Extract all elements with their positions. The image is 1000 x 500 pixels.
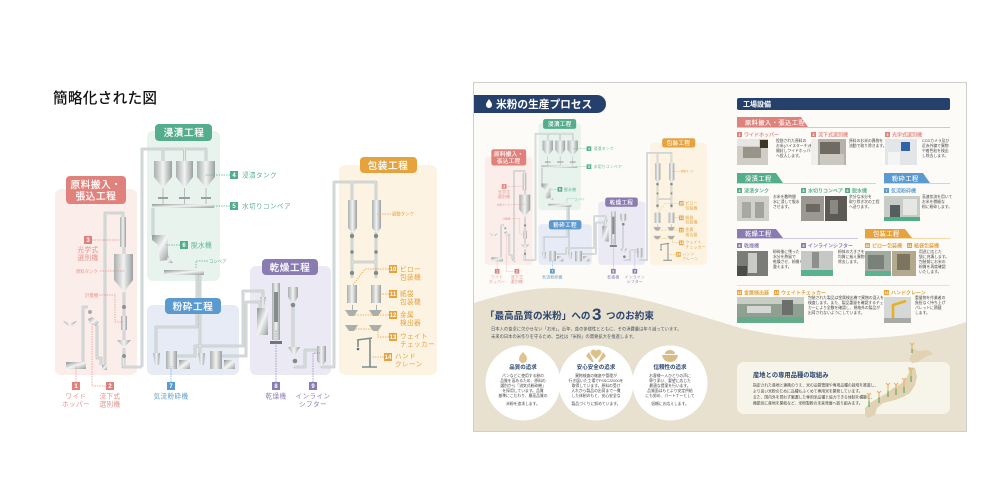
- labels: packaging: 11: [390, 292, 397, 298]
- mini process diagram: 選別機: [511, 279, 523, 284]
- section: drying equipment: 除去します。: [838, 259, 860, 264]
- section: milling equipment: 粉に粉砕します。: [922, 204, 952, 209]
- title: 簡略化された図: [53, 89, 157, 107]
- section: drying equipment: 粉体の大きさを: [838, 249, 865, 254]
- mini process diagram: 包装機: [685, 205, 698, 210]
- section: raw material equipment: 2: [812, 133, 814, 137]
- labels: milling: 7: [169, 384, 173, 390]
- banner: rice flour production process: [474, 95, 606, 113]
- labels: soaking: 浸漬タンク: [242, 170, 277, 180]
- mini process diagram: 12: [679, 228, 683, 232]
- circle: pursuit of safety: 製品づくりに努めています。: [572, 401, 620, 406]
- circle: pursuit of quality: パンなどに使用する粉の: [502, 373, 544, 378]
- section: packaging equipment: [865, 229, 950, 276]
- mini process diagram: 乾燥機: [607, 275, 619, 280]
- section: raw material equipment: お米(ハイスターチ)を: [776, 143, 813, 148]
- circle: pursuit of quality: を採用しています。品質: [502, 388, 544, 393]
- circle: pursuit of reliability: 品質面はもとより安定供給: [647, 388, 693, 393]
- heading: milling: 粉砕工程: [173, 301, 213, 313]
- intro text: 未来の日本の米作りを守るため、当社は「米粉」の需要拡大を推進します。: [491, 333, 637, 340]
- section: drying equipment: 9: [802, 244, 804, 248]
- mini process diagram: 粉砕工程: [553, 221, 577, 229]
- section: raw material equipment: 原料のお米の異物を: [849, 138, 883, 143]
- process diagram: [55, 124, 437, 408]
- mini process diagram: 光学式: [498, 189, 510, 194]
- circle: pursuit of reliability: 信頼にお応えします。: [651, 401, 689, 406]
- labels: packaging: 紙袋: [400, 289, 414, 298]
- section: inspection equipment: パレットに積載: [915, 305, 942, 310]
- mini process diagram: 流下式: [511, 275, 523, 280]
- circle: pursuit of quality: 米粉を追求します。: [506, 401, 540, 406]
- mini process diagram: 気流粉砕機: [542, 275, 563, 280]
- leader lines: [76, 175, 391, 386]
- section: drying equipment: [737, 229, 869, 276]
- labels: raw material: 1: [74, 384, 78, 390]
- labels: drying: 8: [274, 384, 278, 390]
- labels: packaging: チェッカー: [400, 340, 435, 348]
- mini process diagram: 14: [676, 253, 680, 257]
- circle: pursuit of safety: 行き届いた工場でFSSC22000を: [569, 378, 624, 383]
- section: milling equipment: 高速気流を用いて: [922, 194, 952, 199]
- heading: packaging: [360, 157, 417, 173]
- circle: pursuit of reliability: 寄り添い、要望に応じた: [649, 378, 691, 383]
- circle: pursuit of reliability: [632, 346, 708, 420]
- mini process diagram: 10: [679, 202, 683, 206]
- panel: regional partnership: 機能別に産地を開拓など、米粉製粉の未来発展へ取り組みます。: [753, 400, 863, 406]
- labels: packaging: 検出器: [400, 318, 421, 327]
- mini process diagram: 原料搬入・: [494, 150, 524, 158]
- section: milling equipment: 7: [886, 189, 888, 193]
- section: raw material equipment: 近赤外線で異物: [922, 143, 949, 148]
- circle: pursuit of safety: 安心安全の追求: [577, 363, 616, 371]
- mini process diagram: 原料タンク: [497, 203, 510, 207]
- circle: pursuit of reliability: 最適な提案を行います。: [649, 383, 691, 388]
- mini process diagram: 脱水機: [564, 187, 576, 192]
- labels: raw material: 2: [108, 384, 112, 390]
- panel: milling: [147, 305, 239, 375]
- section: raw material equipment: ワイドホッパー: [744, 132, 779, 138]
- section: soaking equipment: 浸漬タンク: [744, 188, 769, 194]
- labels: soaking: 6: [182, 243, 186, 249]
- mini process diagram: 金属: [685, 227, 694, 232]
- section: raw material equipment: や着色粒を検出: [922, 148, 949, 153]
- section: soaking equipment: 浸漬工程: [745, 175, 772, 183]
- section: inspection equipment: 12: [738, 291, 742, 295]
- mini process diagram: ワイド: [491, 275, 503, 280]
- labels: packaging: ウェイト: [400, 332, 428, 340]
- labels: drying: 乾燥機: [266, 392, 286, 400]
- section: packaging equipment: 11: [908, 244, 911, 248]
- section: drying equipment: 乾燥機: [744, 242, 759, 250]
- mini process diagram: 計量機: [502, 217, 510, 221]
- labels: packaging: 10: [390, 267, 397, 273]
- intro text: 日本人の食卓に欠かせない「お米」。近年、食の多様性とともに、その消費量は年々減っています。: [491, 326, 681, 332]
- section: drying equipment: 整えます。: [773, 264, 792, 269]
- section: milling equipment: 粉砕工程: [892, 175, 919, 183]
- circle: pursuit of quality: 品質の追求: [509, 363, 537, 371]
- mini process diagram: 乾燥工程: [610, 198, 633, 206]
- section: raw material equipment: 流下式選別機: [818, 132, 848, 138]
- panel: regional partnership: また、国内外を問わず厳選した専用米品種と協力できる体制を構築し、: [753, 394, 874, 400]
- section: packaging equipment: 10: [866, 244, 870, 248]
- panel: regional partnership: より良い米粉のために品種もふくめて専用米を開発しています。: [753, 388, 863, 394]
- icon: rice bowl: [662, 350, 678, 362]
- section: raw material equipment: し除去します。: [922, 153, 948, 158]
- section: soaking equipment: 水に浸して吸水: [773, 199, 800, 204]
- labels: drying: 9: [311, 384, 315, 390]
- mini process diagram: シフター: [627, 279, 643, 284]
- section: inspection equipment: 金属検出器: [744, 290, 769, 296]
- mini process diagram: チェッカー: [685, 244, 706, 249]
- banner: rice flour production process: 米粉の生産プロセス: [496, 98, 592, 111]
- mini process diagram: 13: [679, 241, 683, 245]
- heading: raw material intake: 張込工程: [76, 192, 116, 202]
- labels: milling: 気流粉砕機: [154, 392, 188, 400]
- section: inspection equipment: 検査します。また、製品重量を確認するチェッ: [808, 300, 888, 305]
- mini process diagram: 3: [503, 185, 505, 189]
- labels: packaging: 12: [390, 313, 397, 319]
- labels: packaging: ハンド: [395, 354, 416, 360]
- circle: pursuit of reliability: にも努め、パートナーとして: [645, 393, 695, 398]
- panel: drying: [250, 266, 331, 375]
- mini process diagram: ピロー: [685, 201, 698, 206]
- labels: packaging: ピロー: [400, 266, 421, 274]
- labels: raw material: 3: [86, 238, 90, 244]
- section: inspection equipment: 14: [884, 291, 888, 295]
- labels: milling: [154, 382, 188, 400]
- circle: pursuit of safety: [558, 346, 634, 420]
- section: packaging equipment: 包装前にお米の: [919, 259, 946, 264]
- labels: packaging: 包装機: [400, 297, 421, 306]
- labels: packaging: 金属: [400, 310, 414, 319]
- mini process diagram: インライン: [625, 275, 645, 280]
- heading: raw material intake: 原料搬入・: [71, 179, 121, 191]
- circle: pursuit of reliability: 信頼性の追求: [653, 363, 687, 371]
- panel: regional partnership: 産地との専用品種の取組み: [753, 370, 829, 379]
- labels: soaking: [180, 170, 291, 265]
- labels: packaging: [384, 210, 435, 368]
- tanks: [114, 161, 215, 292]
- heading: drying: [262, 259, 318, 275]
- circle: pursuit of quality: 基準にこだわり、最高品質の: [498, 393, 548, 398]
- section: raw material equipment: 開封しワイドホッパー: [776, 148, 814, 153]
- section: raw material equipment: 原料搬入・張込工程: [745, 119, 805, 127]
- section: drying equipment: 乾燥させ、粉質を: [773, 259, 804, 264]
- mini process diagram: 包装工程: [667, 139, 690, 147]
- mini process diagram: 8: [612, 270, 614, 274]
- section: inspection equipment: します。: [915, 310, 930, 315]
- heading: factory equipment: [737, 98, 950, 110]
- divider: [737, 284, 950, 287]
- mini process diagram: 2: [516, 270, 518, 274]
- labels: packaging: 13: [390, 335, 397, 341]
- circle: pursuit of quality: [486, 346, 560, 420]
- section: packaging equipment: 粉質を再度確認: [919, 264, 946, 269]
- heading: drying: 乾燥工程: [270, 262, 310, 274]
- section: raw material equipment: 3: [886, 133, 888, 137]
- section: inspection equipment: ウェイトチェッカー: [781, 290, 826, 296]
- circle: pursuit of quality: 選別から「流気式粉砕機」: [500, 383, 546, 388]
- labels: raw material: 計量機: [85, 292, 99, 299]
- mini process diagram: 1: [496, 270, 498, 274]
- heading: packaging: 包装工程: [368, 160, 408, 172]
- heading: soaking: [155, 124, 212, 141]
- heading: three promises: 「最高品質の米粉」への: [485, 310, 591, 322]
- labels: raw material: [62, 236, 120, 408]
- mini process diagram: 浸漬工程: [548, 120, 572, 128]
- circle: pursuit of quality: 品質を高めるため、原料の: [500, 378, 546, 383]
- mini process diagram: 5: [588, 165, 590, 169]
- map of Japan with rice plants: [865, 343, 933, 418]
- mini process diagram: 4: [588, 147, 590, 151]
- section: drying equipment: 水分を熱風で: [773, 254, 796, 259]
- labels: raw material: 原料タンク: [76, 268, 98, 275]
- heading: three promises: つのお約束: [606, 310, 654, 322]
- circle: pursuit of reliability: お客様一人ひとりの声に: [649, 373, 691, 378]
- section: soaking equipment: 余分な水分を: [849, 194, 872, 199]
- section: raw material equipment: CCDカメラ及び: [922, 138, 949, 143]
- intro text: [491, 326, 681, 340]
- labels: soaking: 5: [232, 204, 236, 210]
- mini process diagram: 浸漬タンク: [594, 146, 614, 151]
- section: inspection equipment: 負担なく持ち上げ: [915, 300, 946, 305]
- mini process diagram: 調整タンク: [681, 169, 694, 173]
- mini process diagram: 包装機: [685, 220, 698, 225]
- icon: sparkle drop: [519, 352, 527, 363]
- labels: raw material: 光学式: [78, 245, 98, 254]
- section: inspection equipment: カーにより全数を確認し、規格外の製品が: [808, 305, 880, 310]
- circle: pursuit of safety: した体制のもと、安心安全な: [571, 393, 621, 398]
- mini process diagram: ホッパー: [489, 279, 505, 284]
- section: inspection equipment: 重量物を作業者の: [915, 295, 946, 300]
- labels: packaging: 調整タンク: [392, 210, 414, 218]
- heading: three promises: 3: [592, 305, 601, 324]
- section: raw material equipment: へ投入します。: [776, 153, 802, 158]
- section: soaking equipment: [737, 173, 880, 221]
- heading: milling: [165, 298, 221, 314]
- section: drying equipment: インラインシフター: [808, 242, 853, 250]
- section: packaging equipment: 袋に充填します。: [919, 254, 949, 259]
- mini process diagram: 水切りコンベア: [594, 164, 622, 169]
- labels: raw material: ホッパー: [62, 400, 90, 408]
- section: milling equipment: 気流粉砕機: [891, 188, 916, 194]
- labels: drying: シフター: [299, 400, 327, 408]
- heading: soaking: 浸漬工程: [164, 127, 204, 139]
- mini process diagram: ウェイト: [685, 240, 702, 245]
- labels: packaging: 包装機: [400, 272, 421, 282]
- panel: soaking: [147, 131, 220, 281]
- mini process diagram: クレーン: [682, 256, 699, 261]
- labels: soaking: 水切りコンベア: [242, 202, 291, 210]
- mini process diagram: 選別機: [498, 194, 510, 199]
- panel: packaging: [339, 165, 437, 375]
- mini process diagram: ハンド: [682, 252, 695, 256]
- mini process diagram: 7: [551, 270, 553, 274]
- machinery and pipes: [63, 149, 382, 370]
- section: raw material equipment: 1: [738, 133, 740, 137]
- mini process diagram: コンベア: [574, 197, 585, 201]
- mini process diagram: 紙袋: [685, 215, 694, 220]
- labels: raw material: 流下式: [100, 392, 120, 400]
- section: milling equipment: お米を微細な: [922, 199, 945, 204]
- section: drying equipment: 均質に揃え異物を: [838, 254, 869, 259]
- section: soaking equipment: お米を数時間: [773, 194, 796, 199]
- circle: pursuit of safety: 取得しています。原料の受け: [572, 383, 621, 388]
- labels: soaking: 脱水機: [191, 240, 212, 250]
- section: raw material equipment: 流動で取り除きます。: [849, 143, 887, 148]
- mini process diagram: 11: [679, 216, 683, 220]
- icon: hands and heart: [586, 350, 606, 362]
- labels: soaking: コンベア: [209, 259, 227, 265]
- labels: drying: [266, 382, 330, 408]
- section: soaking equipment: へ送ります。: [849, 204, 871, 209]
- brochure page: [474, 82, 966, 432]
- section: soaking equipment: 4: [738, 189, 740, 193]
- section: soaking equipment: させます。: [773, 204, 792, 209]
- section: packaging equipment: 包装工程: [873, 230, 900, 238]
- section: packaging equipment: 用途に応じた: [919, 249, 942, 254]
- mini process diagram: 6: [559, 188, 561, 192]
- section: packaging equipment: ピロー包装機: [872, 242, 902, 250]
- heading: factory equipment: 工場設備: [743, 100, 771, 108]
- section: raw material equipment: 投袋された原料の: [776, 138, 807, 143]
- section: drying equipment: 乾燥工程: [745, 230, 772, 238]
- section: soaking equipment: 6: [846, 189, 848, 193]
- section: raw material equipment: [737, 117, 950, 165]
- labels: raw material: 選別機: [78, 253, 98, 262]
- mini process diagram: [485, 119, 707, 284]
- section: inspection equipment: [737, 290, 946, 323]
- panel: regional partnership: [737, 362, 950, 414]
- section: soaking equipment: 水切りコンベア: [808, 188, 843, 194]
- section: inspection equipment: 13: [774, 291, 778, 295]
- labels: raw material: ワイド: [66, 392, 86, 400]
- circle: pursuit of safety: 異物検査の徹底や管理が: [575, 373, 617, 378]
- mini process diagram: 検出器: [685, 232, 698, 237]
- section: soaking equipment: 取り除き次の工程: [849, 199, 880, 204]
- section: packaging equipment: いたします。: [919, 269, 941, 274]
- section: soaking equipment: 脱水機: [852, 188, 867, 194]
- labels: packaging: クレーン: [395, 360, 423, 368]
- labels: drying: インライン: [296, 392, 330, 400]
- heading: three promises: [485, 305, 654, 324]
- section: soaking equipment: 5: [802, 189, 804, 193]
- heading: raw material intake: [66, 176, 126, 204]
- labels: raw material: 選別機: [100, 400, 120, 408]
- labels: soaking: 4: [232, 173, 236, 179]
- panel: raw material intake: [55, 189, 137, 375]
- section: drying equipment: 8: [738, 244, 740, 248]
- labels: packaging: 14: [385, 355, 392, 361]
- mini process diagram: 張込工程: [497, 157, 521, 165]
- section: inspection equipment: 出荷されないようにしています。: [808, 310, 864, 315]
- section: inspection equipment: 包装された製品は金属検出機で異物の混入を: [808, 295, 884, 300]
- circle: pursuit of safety: 入れから製品の出荷まで一貫: [571, 388, 621, 393]
- beige wave background: [474, 288, 966, 431]
- section: inspection equipment: ハンドクレーン: [891, 290, 926, 296]
- section: packaging equipment: 紙袋包装機: [914, 242, 939, 250]
- panel: regional partnership: 指定された産地と連携のうえ、米の品質管理や専用品種の栽培を推進し、: [753, 382, 878, 388]
- section: milling equipment: [884, 173, 952, 221]
- mini process diagram: 9: [634, 270, 636, 274]
- section: drying equipment: 粉砕後に残った: [773, 249, 800, 254]
- section: raw material equipment: 光学式選別機: [892, 132, 922, 138]
